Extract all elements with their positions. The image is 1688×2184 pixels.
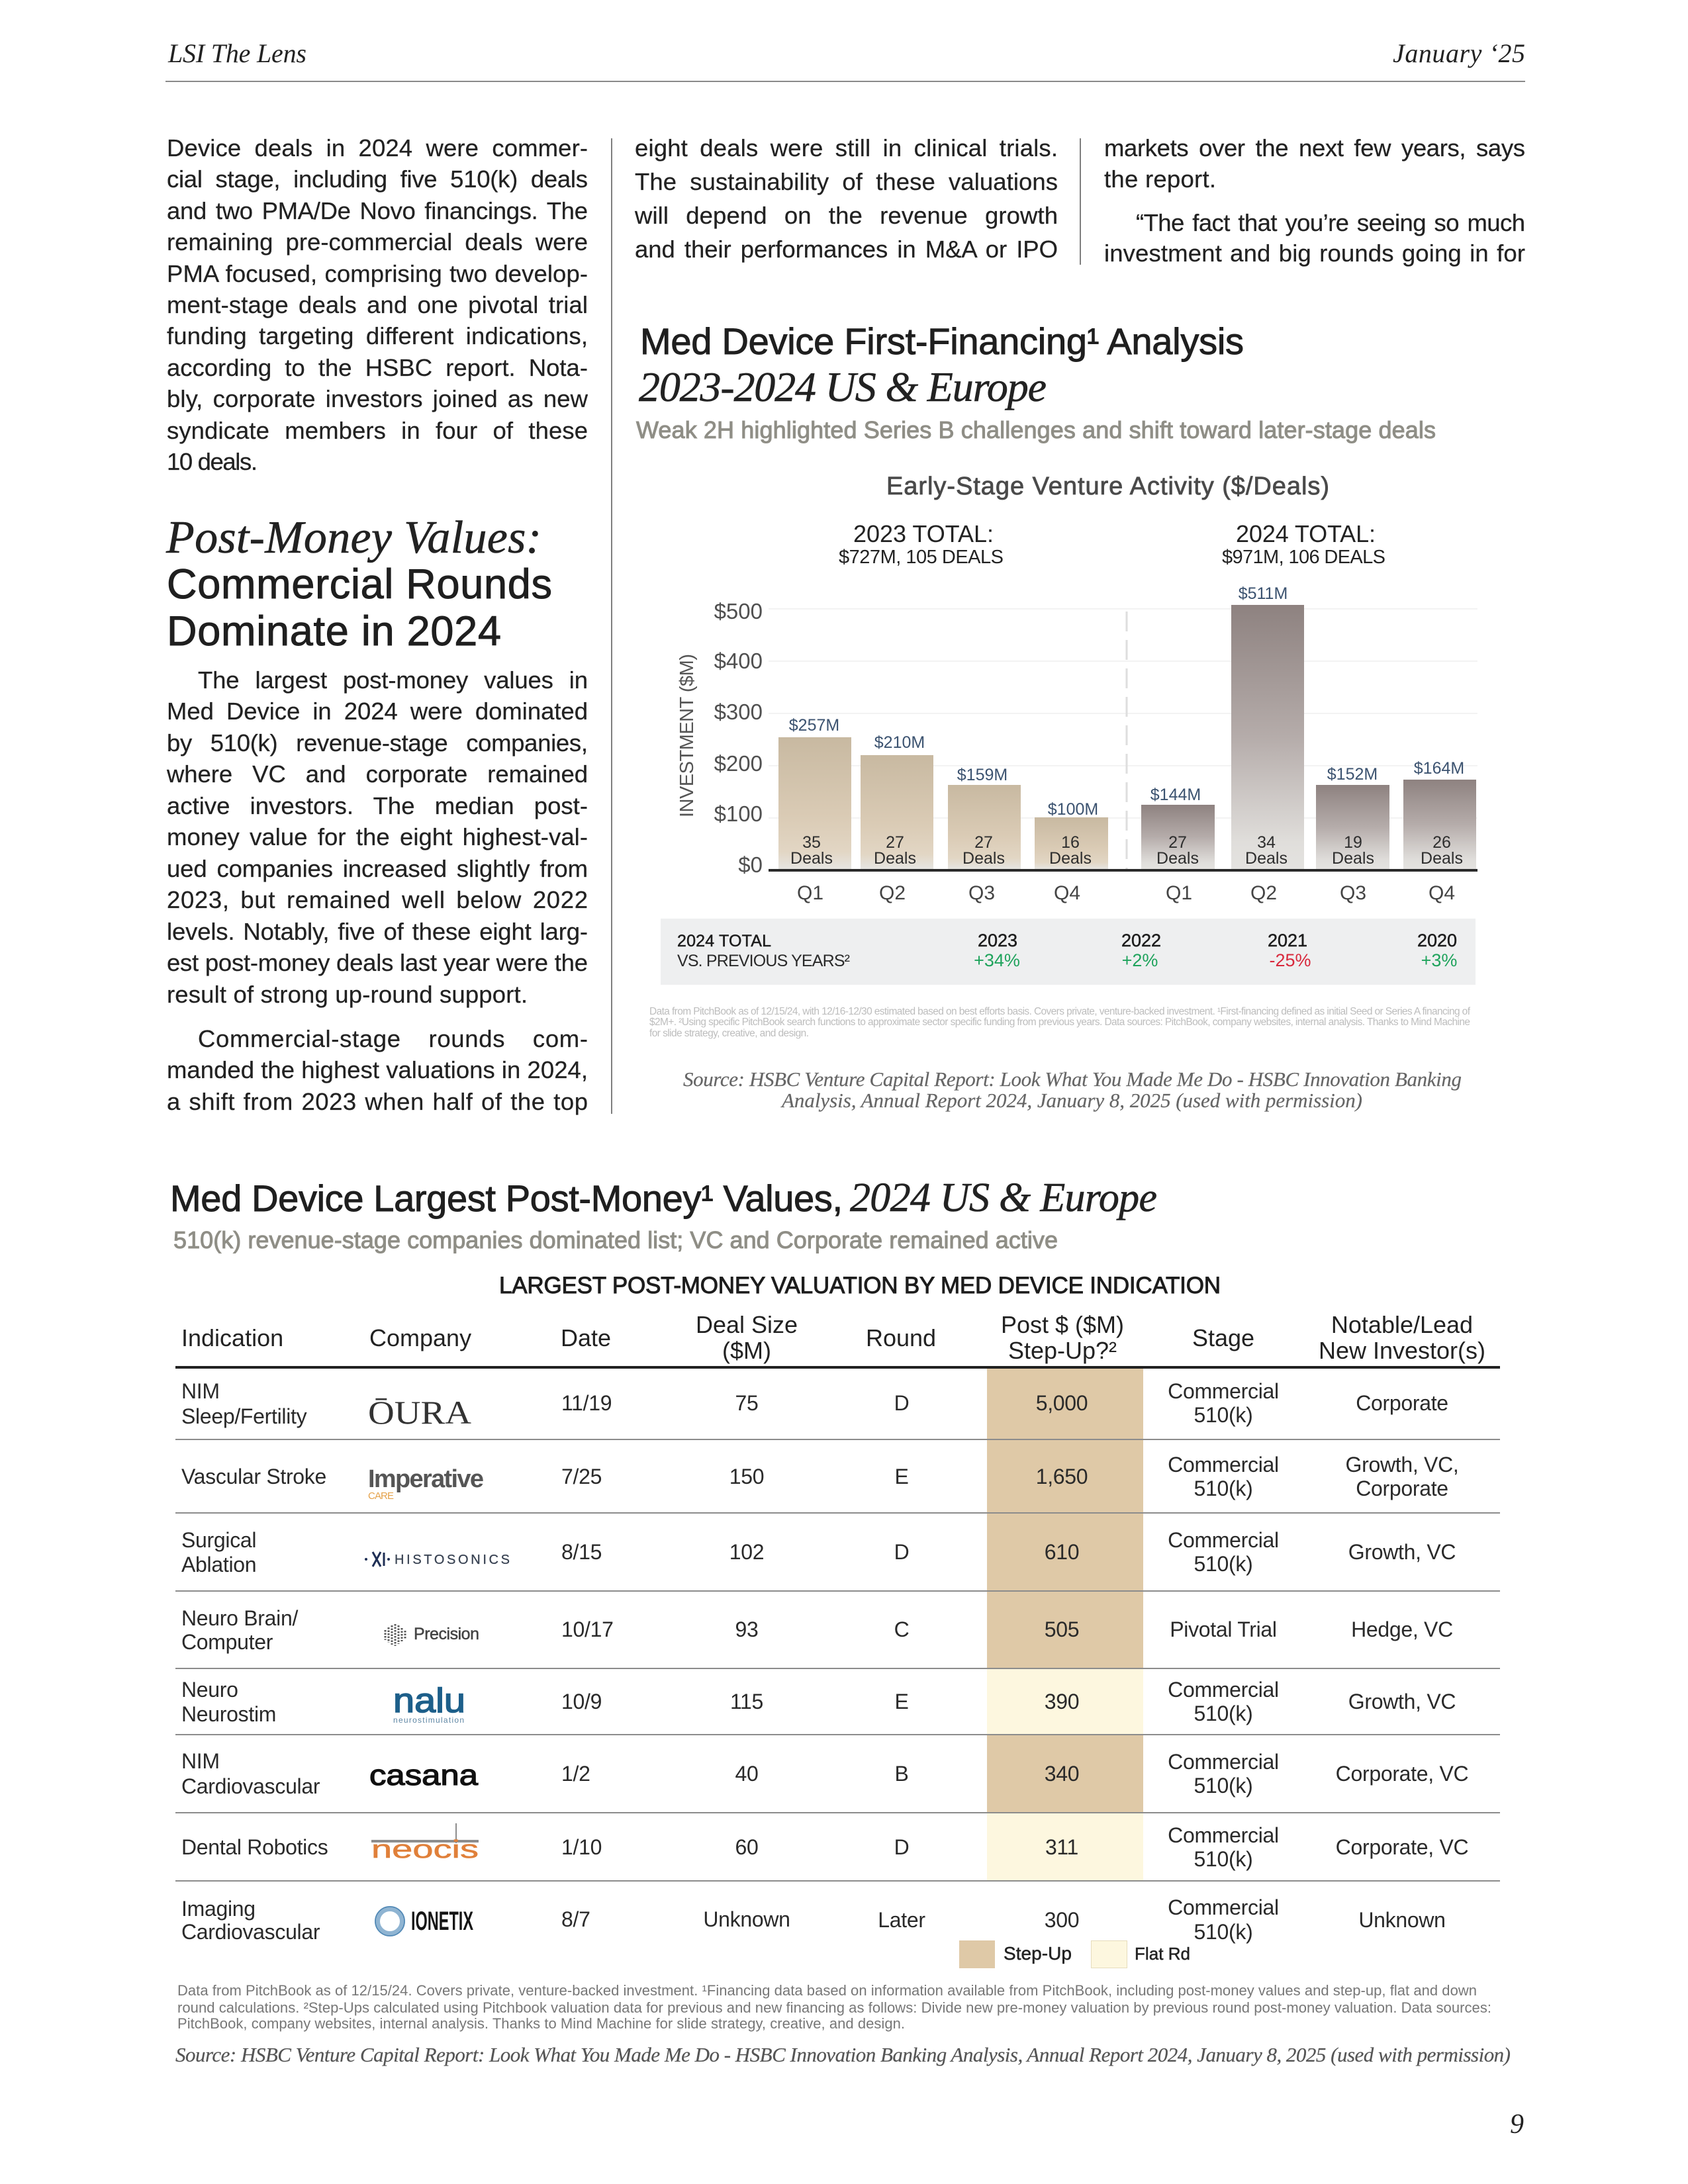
table: largest post-money valuation xyxy=(175,1311,1500,1944)
deal counts: Deals xyxy=(1332,849,1374,868)
row: Neocis: 510(k) xyxy=(1194,1847,1252,1871)
highlighted post-money cells xyxy=(987,1369,1143,1882)
panel: 2024 total vs previous years: VS. PREVIOUS YEARS² xyxy=(677,952,850,970)
table footnote: PitchBook, company websites, internal analysis. Thanks to Mind Machine for slide strategy, creative, and design. xyxy=(177,2015,905,2032)
paragraph: largest post-money values: by 510(k) revenue-stage companies, xyxy=(167,729,588,756)
row: Histosonics xyxy=(181,1528,1456,1576)
bars 2024 xyxy=(1141,605,1476,869)
row: Neocis: 1/10 xyxy=(561,1835,602,1859)
row: Histosonics: D xyxy=(894,1540,909,1564)
row: Casana: 510(k) xyxy=(1194,1774,1252,1797)
panel: 2024 total vs previous years xyxy=(661,919,1476,985)
bar value labels: $100M xyxy=(1048,800,1098,819)
table header row: New Investor(s) xyxy=(1319,1337,1485,1364)
row: Ionetix: 8/7 xyxy=(561,1907,590,1931)
panel: 2024 total vs previous years: 2022 xyxy=(1121,931,1161,950)
row: Nalu: 390 xyxy=(1045,1690,1079,1713)
2024 total label xyxy=(1222,520,1385,568)
paragraph: largest post-money values: levels. Notably, five of these eight larg- xyxy=(167,918,588,945)
row: Casana: 1/2 xyxy=(561,1762,590,1786)
row: Ionetix: Commercial xyxy=(1168,1895,1279,1919)
logo: Neocis: neocis xyxy=(371,1836,479,1864)
y axis labels xyxy=(714,599,763,877)
legend: Step-Up xyxy=(1004,1943,1072,1964)
logo: Nalu: neurostimulation xyxy=(393,1715,464,1725)
quarter labels: Q2 xyxy=(879,882,906,904)
row: Casana: 40 xyxy=(735,1762,759,1786)
row: Imperative Care: Corporate xyxy=(1356,1477,1448,1500)
paragraph: device deals: according to the HSBC report. Nota- xyxy=(167,354,588,381)
table header row xyxy=(181,1311,1485,1364)
row: Precision: Pivotal Trial xyxy=(1170,1617,1277,1641)
row: Oura: NIM xyxy=(181,1379,220,1403)
deal counts: 34 xyxy=(1257,833,1276,852)
table source: Source: HSBC Venture Capital Report: Look What You Made Me Do - HSBC Innovation Banking Analysis, Annual Report 2024, January 8, 2025 (used with permission) xyxy=(175,2043,1511,2066)
quarter labels: Q3 xyxy=(1340,882,1366,904)
table header row: Deal Size xyxy=(696,1311,798,1338)
text column 3: “The fact that you’re seeing so much xyxy=(1136,209,1525,236)
row: Oura: 510(k) xyxy=(1194,1403,1252,1427)
2023 total label: $727M, 105 DEALS xyxy=(839,547,1004,568)
text column 1 xyxy=(165,134,588,1115)
row: Oura xyxy=(181,1379,1448,1431)
text column 2: will depend on the revenue growth xyxy=(634,202,1058,229)
quarter labels: Q2 xyxy=(1250,882,1277,904)
row: Casana: NIM xyxy=(181,1749,220,1773)
paragraph: largest post-money values: ued companies increased slightly from xyxy=(167,855,588,882)
table footnote: Data from PitchBook as of 12/15/24. Covers private, venture-backed investment. ¹Financing data based on information available from PitchBook, including post-money values and step-up, flat and down xyxy=(177,1982,1477,1999)
table title: LARGEST POST-MONEY VALUATION BY MED DEVICE INDICATION xyxy=(499,1273,1221,1298)
deal counts: 26 xyxy=(1432,833,1451,852)
quarter labels: Q1 xyxy=(797,882,823,904)
y axis labels: $500 xyxy=(714,599,763,623)
deal counts: 27 xyxy=(1168,833,1187,852)
panel: 2024 total vs previous years: 2021 xyxy=(1268,931,1307,950)
row: Imperative Care: Commercial xyxy=(1168,1453,1279,1477)
row: Ionetix: Unknown xyxy=(1358,1908,1446,1932)
row: Ionetix: 300 xyxy=(1045,1908,1079,1932)
row: Ionetix xyxy=(181,1895,1446,1944)
text column 2: The sustainability of these valuations xyxy=(635,168,1058,195)
row: Oura: 11/19 xyxy=(561,1391,612,1415)
row: Nalu: 115 xyxy=(730,1690,763,1713)
column divider 1 xyxy=(611,138,612,1114)
quarter labels: Q4 xyxy=(1054,882,1080,904)
deal counts: 35 xyxy=(802,833,821,852)
bar value labels: $152M xyxy=(1327,765,1378,784)
row: Oura: Corporate xyxy=(1356,1391,1448,1415)
row: Ionetix: Imaging xyxy=(181,1897,256,1921)
chart source: Analysis, Annual Report 2024, January 8, 2025 (used with permission) xyxy=(780,1089,1362,1112)
paragraph: largest post-money values: The largest post-money values in xyxy=(198,666,588,694)
table footnote xyxy=(177,1982,1491,2032)
row: Casana: 340 xyxy=(1045,1762,1079,1786)
row: Neocis: Dental Robotics xyxy=(181,1835,328,1859)
deal counts: Deals xyxy=(1245,849,1288,868)
y axis title: INVESTMENT ($M) xyxy=(677,654,698,817)
text column 2: eight deals were still in clinical trials. xyxy=(635,134,1058,161)
heading: post-money values: Commercial Rounds xyxy=(167,561,552,608)
heading: first-financing analysis: Weak 2H highlighted Series B challenges and shift toward later-stage deals xyxy=(636,416,1436,443)
column divider 2 xyxy=(1080,138,1081,265)
row: Histosonics: Surgical xyxy=(181,1528,256,1552)
logo: Imperative Care: CARE xyxy=(368,1490,394,1502)
chart footnote: $2M+. ²Using specific PitchBook search functions to approximate sector specific funding from previous years. Data sources: PitchBook, company websites, internal analysis. Thanks to Mind Machine xyxy=(649,1017,1470,1028)
row: Ionetix: Cardiovascular xyxy=(181,1920,320,1944)
row: Oura: Sleep/Fertility xyxy=(181,1404,307,1428)
panel: 2024 total vs previous years: -25% xyxy=(1269,950,1311,970)
heading: first-financing analysis: 2023-2024 US & Europe xyxy=(639,363,1047,410)
heading: post-money values xyxy=(165,512,552,655)
row: Ionetix: Later xyxy=(878,1908,925,1932)
text column 3 xyxy=(1104,134,1525,267)
chart footnote xyxy=(649,1006,1471,1039)
logo: Imperative Care: Imperative xyxy=(368,1465,484,1493)
panel: 2024 total vs previous years: 2024 TOTAL xyxy=(677,932,771,950)
row: Histosonics: Growth, VC xyxy=(1348,1540,1456,1564)
logo: Precision: Precision xyxy=(414,1625,479,1643)
text column 3: the report. xyxy=(1104,165,1216,193)
row: Histosonics: 8/15 xyxy=(561,1540,602,1564)
row: Histosonics: 510(k) xyxy=(1194,1552,1252,1576)
paragraph: largest post-money values: 2023, but remained well below 2022 xyxy=(167,886,588,913)
paragraph: commercial-stage rounds xyxy=(167,1025,588,1115)
deal counts: Deals xyxy=(874,849,916,868)
bar value labels: $144M xyxy=(1150,786,1201,804)
row: Precision: 10/17 xyxy=(561,1617,614,1641)
row: Neocis xyxy=(181,1823,1468,1871)
table footnote: round calculations. ²Step-Ups calculated using Pitchbook valuation data for previous and new financing as follows: Divide new pre-money valuation by previous round post-money valuation. Data sources: xyxy=(177,1999,1491,2016)
panel: 2024 total vs previous years: 2023 xyxy=(978,931,1017,950)
row: Neocis: Commercial xyxy=(1168,1823,1279,1847)
paragraph: device deals: funding targeting different indications, xyxy=(167,322,588,349)
page header: LSI The Lens xyxy=(167,38,306,68)
row: Precision xyxy=(181,1606,1453,1654)
row: Imperative Care: 510(k) xyxy=(1194,1477,1252,1500)
heading: post-money values: Dominate in 2024 xyxy=(167,608,501,655)
row: Imperative Care: Growth, VC, xyxy=(1346,1453,1458,1477)
paragraph: largest post-money values: money value for the eight highest-val- xyxy=(167,823,588,850)
row: Ionetix: Unknown xyxy=(703,1907,790,1931)
bar value labels: $210M xyxy=(874,733,925,752)
bar value labels: $159M xyxy=(957,766,1008,784)
panel: 2024 total vs previous years: +3% xyxy=(1421,950,1457,970)
row: Histosonics: Commercial xyxy=(1168,1528,1279,1552)
logo: Ionetix xyxy=(375,1907,473,1936)
row: Casana: Commercial xyxy=(1168,1750,1279,1774)
table header row: Date xyxy=(561,1324,611,1351)
row: Nalu: 10/9 xyxy=(561,1690,602,1713)
row: Precision: C xyxy=(894,1617,909,1641)
logo: Oura: ŌURA xyxy=(368,1394,471,1431)
deal counts: Deals xyxy=(1156,849,1199,868)
y axis labels: $100 xyxy=(714,801,763,826)
row: Ionetix: 510(k) xyxy=(1194,1920,1252,1944)
legend: Flat Rd xyxy=(1135,1944,1190,1964)
heading: largest post-money values: 2024 US & Europe xyxy=(850,1175,1157,1220)
y axis labels: $400 xyxy=(714,649,763,673)
heading: post-money values: Post-Money Values: xyxy=(165,512,541,563)
heading: largest post-money values: 510(k) revenue-stage companies dominated list; VC and Corporate remained active xyxy=(173,1226,1058,1253)
paragraph: largest post-money values: Med Device in 2024 were dominated xyxy=(167,698,588,725)
row: Neocis: 60 xyxy=(735,1835,759,1859)
row: Precision: 505 xyxy=(1045,1617,1079,1641)
quarter labels: Q4 xyxy=(1429,882,1455,904)
bar value labels xyxy=(789,584,1464,819)
heading: first-financing analysis xyxy=(636,320,1436,443)
panel: 2024 total vs previous years: 2020 xyxy=(1417,931,1457,950)
paragraph: device deals: ment-stage deals and one pivotal trial xyxy=(167,291,588,318)
chart source: Source: HSBC Venture Capital Report: Look What You Made Me Do - HSBC Innovation Banking xyxy=(683,1068,1462,1091)
logo: Nalu: nalu xyxy=(393,1682,465,1720)
deal counts: 19 xyxy=(1344,833,1362,852)
paragraph: device deals: syndicate members in four of these xyxy=(167,417,588,444)
row: Precision: 93 xyxy=(735,1617,759,1641)
quarter labels: Q3 xyxy=(968,882,995,904)
paragraph: device deals: Device deals in 2024 were commer- xyxy=(167,134,588,161)
2023 total label xyxy=(839,520,1004,568)
paragraph: largest post-money values: est post-money deals last year were the xyxy=(167,949,588,976)
quarter labels: Q1 xyxy=(1166,882,1192,904)
deal counts: Deals xyxy=(1049,849,1092,868)
y axis labels: $0 xyxy=(738,852,763,877)
row: Neocis: Corporate, VC xyxy=(1336,1835,1468,1859)
quarter labels xyxy=(797,882,1455,904)
table header row: ($M) xyxy=(722,1337,771,1364)
paragraph: commercial-stage rounds: Commercial-stage rounds com- xyxy=(198,1025,588,1052)
paragraph: device deals: and two PMA/De Novo financings. The xyxy=(167,197,588,224)
text column 2: and their performances in M&A or IPO xyxy=(635,236,1058,263)
chart footnote: for slide strategy, creative, and design. xyxy=(649,1028,809,1039)
paragraph: device deals: remaining pre-commercial deals were xyxy=(167,228,588,255)
logo: Ionetix: IONETIX xyxy=(411,1907,473,1936)
deal counts xyxy=(790,833,1463,868)
text column 2 xyxy=(634,134,1058,263)
deal counts: 27 xyxy=(974,833,993,852)
2024 total label: 2024 TOTAL: xyxy=(1236,520,1376,547)
table header row: Step-Up?² xyxy=(1008,1337,1117,1364)
y axis labels: $300 xyxy=(714,700,763,724)
row: Precision: Hedge, VC xyxy=(1351,1617,1453,1641)
logo: Histosonics: HISTOSONICS xyxy=(395,1553,510,1567)
row: Oura: D xyxy=(894,1391,909,1415)
deal counts: Deals xyxy=(1421,849,1463,868)
legend xyxy=(959,1940,1190,1968)
table header row: Notable/Lead xyxy=(1331,1311,1473,1338)
page header xyxy=(165,38,1525,82)
row: Precision: Neuro Brain/ xyxy=(181,1606,298,1630)
row: Imperative Care: E xyxy=(894,1465,909,1488)
paragraph: largest post-money values: where VC and corporate remained xyxy=(166,760,588,788)
deal counts: 16 xyxy=(1061,833,1080,852)
panel: 2024 total vs previous years: +34% xyxy=(974,950,1020,970)
row: Nalu: Growth, VC xyxy=(1348,1690,1456,1713)
table header row: Stage xyxy=(1192,1324,1254,1351)
logo: Neocis xyxy=(371,1823,479,1864)
deal counts: Deals xyxy=(790,849,833,868)
row: Histosonics: 102 xyxy=(729,1540,764,1564)
row: Histosonics: Ablation xyxy=(181,1553,256,1576)
row: Imperative Care xyxy=(181,1453,1458,1502)
text column 3: markets over the next few years, says xyxy=(1104,134,1525,161)
table header row: Company xyxy=(369,1324,471,1351)
bars 2023 xyxy=(778,737,1108,869)
2023 total label: 2023 TOTAL: xyxy=(853,520,994,547)
row: Imperative Care: 150 xyxy=(729,1465,764,1488)
text column 3: investment and big rounds going in for xyxy=(1104,240,1525,267)
paragraph: device deals: cial stage, including five 510(k) deals xyxy=(167,165,588,193)
bar value labels: $164M xyxy=(1414,759,1464,778)
2024 total label: $971M, 106 DEALS xyxy=(1222,547,1385,568)
heading: largest post-money values: Med Device Largest Post-Money¹ Values, xyxy=(170,1177,843,1219)
row: Neocis: 311 xyxy=(1045,1835,1078,1859)
logo: Precision xyxy=(385,1624,479,1646)
paragraph: commercial-stage rounds: a shift from 2023 when half of the top xyxy=(167,1088,588,1115)
row: Nalu: 510(k) xyxy=(1194,1702,1252,1725)
logo: Casana: casana xyxy=(369,1759,479,1792)
row: Neocis: D xyxy=(894,1835,909,1859)
row: Nalu: Commercial xyxy=(1168,1678,1279,1702)
table header row: Round xyxy=(866,1324,936,1351)
row: Histosonics: 610 xyxy=(1045,1540,1079,1564)
deal counts: 27 xyxy=(886,833,904,852)
panel: 2024 total vs previous years: +2% xyxy=(1122,950,1158,970)
paragraph: largest post-money values: result of strong up-round support. xyxy=(167,981,528,1008)
row: Casana: B xyxy=(894,1762,909,1786)
row: Casana: Cardiovascular xyxy=(181,1774,320,1798)
paragraph: largest post-money values: active investors. The median post- xyxy=(167,792,588,819)
row: Nalu: Neurostim xyxy=(181,1702,276,1726)
row: Nalu xyxy=(181,1678,1456,1726)
y axis labels: $200 xyxy=(714,751,763,776)
chart footnote: Data from PitchBook as of 12/15/24, with 12/16-12/30 estimated based on best efforts basis. Covers private, venture-backed investment. ¹First-financing defined as initial Seed or Series A financing of xyxy=(649,1006,1471,1017)
paragraph: device deals: 10 deals. xyxy=(167,448,258,475)
chart source xyxy=(683,1068,1462,1112)
row: Imperative Care: 7/25 xyxy=(561,1465,602,1488)
row: Imperative Care: Vascular Stroke xyxy=(181,1465,326,1488)
row: Oura: Commercial xyxy=(1168,1379,1279,1403)
row: Imperative Care: 1,650 xyxy=(1036,1465,1088,1488)
row: Casana xyxy=(181,1749,1468,1798)
paragraph: largest post-money values xyxy=(166,666,588,1008)
row: Oura: 75 xyxy=(735,1391,759,1415)
bar value labels: $511M xyxy=(1239,584,1288,603)
row: Precision: Computer xyxy=(181,1630,273,1654)
heading: first-financing analysis: Med Device First-Financing¹ Analysis xyxy=(640,320,1244,362)
page header: January ‘25 xyxy=(1393,38,1525,68)
paragraph: commercial-stage rounds: manded the highest valuations in 2024, xyxy=(167,1056,588,1083)
row: Nalu: E xyxy=(894,1690,909,1713)
table header row: Post $ ($M) xyxy=(1001,1311,1124,1338)
row: Casana: Corporate, VC xyxy=(1336,1762,1468,1786)
paragraph: device deals xyxy=(167,134,588,475)
table header row: Indication xyxy=(181,1324,283,1351)
row: Nalu: Neuro xyxy=(181,1678,238,1702)
page number: 9 xyxy=(1510,2109,1524,2140)
paragraph: device deals: PMA focused, comprising two develop- xyxy=(167,260,588,287)
heading: largest post-money values xyxy=(170,1175,1157,1253)
bar chart: early-stage venture activity xyxy=(677,584,1477,904)
chart title: Early-Stage Venture Activity ($/Deals) xyxy=(886,473,1329,500)
bar value labels: $257M xyxy=(789,716,839,735)
paragraph: device deals: bly, corporate investors joined as new xyxy=(167,385,588,412)
row: Oura: 5,000 xyxy=(1036,1391,1088,1415)
deal counts: Deals xyxy=(962,849,1005,868)
